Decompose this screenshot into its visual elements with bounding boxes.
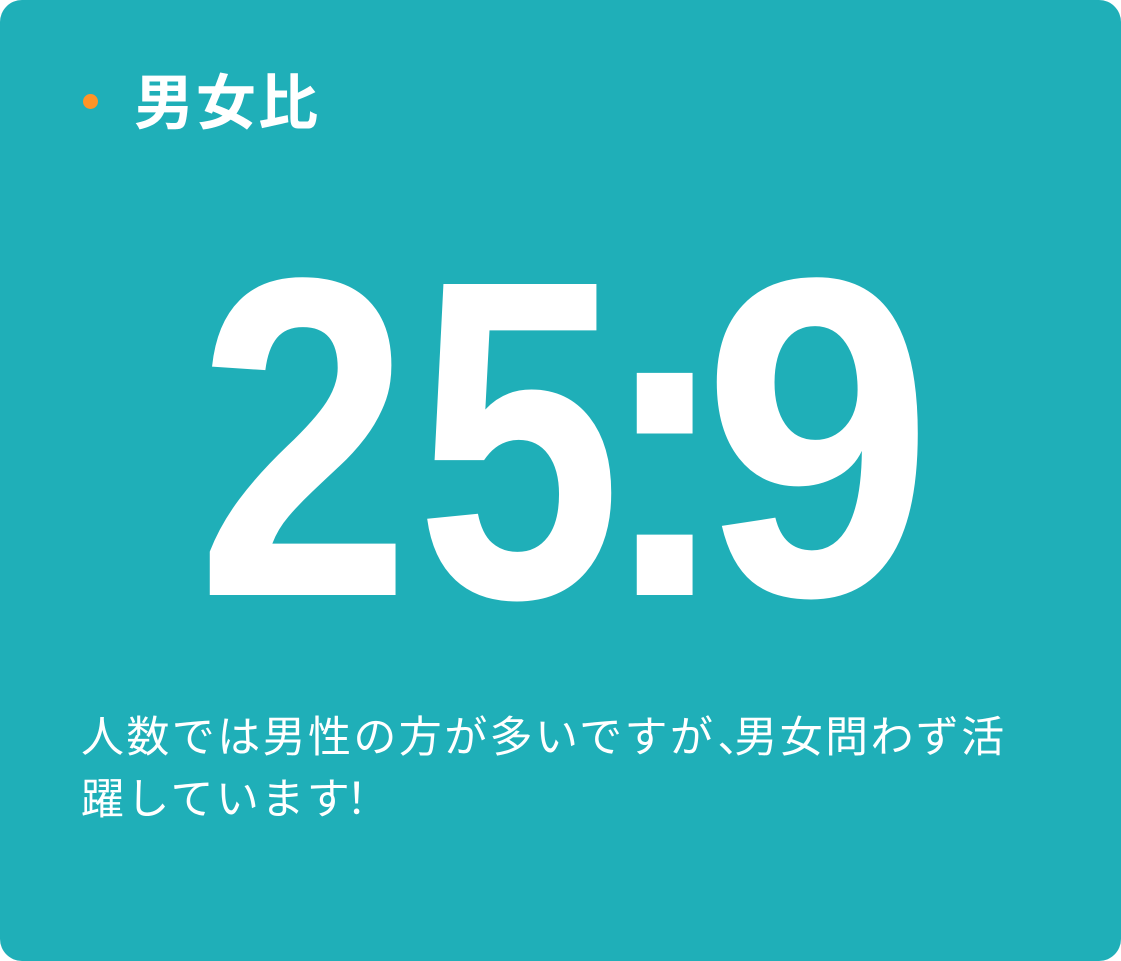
icon: orange bullet dot <box>83 94 98 109</box>
big ratio number 25:9: 5 <box>416 186 622 694</box>
heading: gender ratio: 男女比 <box>134 70 320 137</box>
text block: description: 人数では男性の方が多いですが、男女問わず活 <box>81 714 1007 762</box>
big ratio number 25:9: : <box>599 197 731 688</box>
text block: description: 躍しています！ <box>81 776 381 824</box>
text block: description <box>81 714 1007 824</box>
big ratio number 25:9: 9 <box>702 184 933 692</box>
big ratio number 25:9: 2 <box>196 184 411 692</box>
